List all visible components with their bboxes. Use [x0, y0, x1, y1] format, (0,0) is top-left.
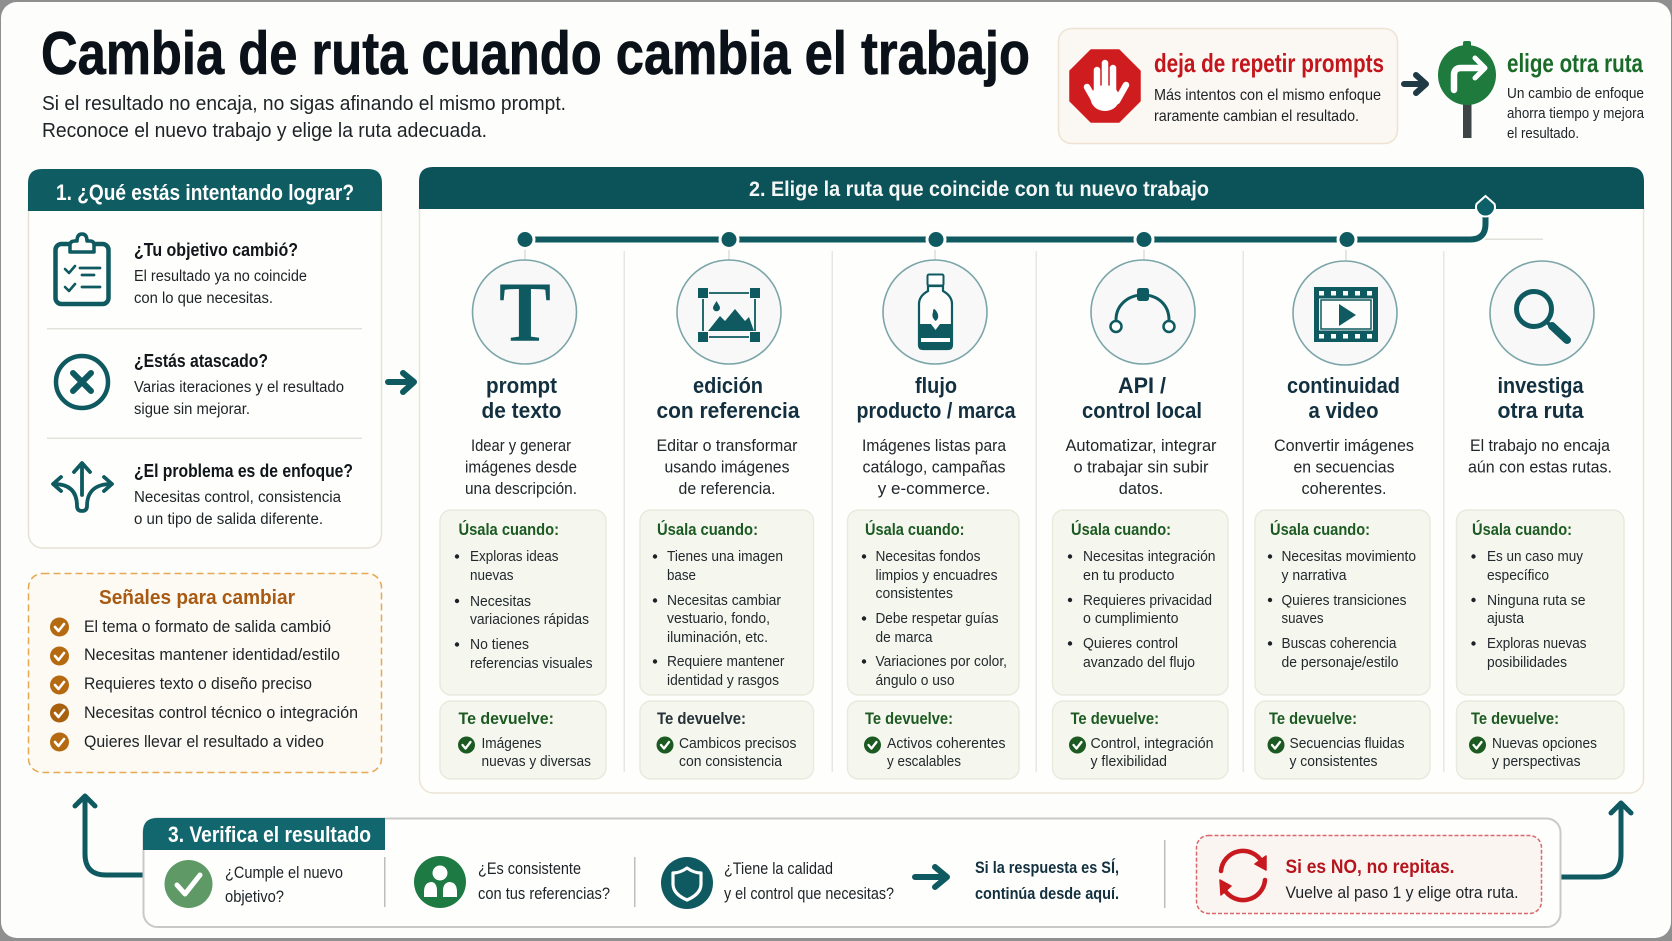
route: flujo producto / marca: producto / marca [856, 398, 1016, 423]
usala cuando: nuevas [470, 567, 514, 584]
panel: 3. verifica el resultado: ¿Cumple el nuevo [225, 864, 343, 882]
text: elige otra ruta: ahorra tiempo y mejora [1507, 105, 1645, 122]
route: prompt de texto: una descripción. [465, 480, 577, 498]
usala cuando [1456, 510, 1624, 695]
icon: bottle [883, 260, 987, 364]
te devuelve: Te devuelve: [1269, 710, 1357, 728]
panel: 3. verifica el resultado: ¿Tiene la calidad [724, 860, 833, 878]
usala cuando: Exploras nuevas [1487, 635, 1586, 652]
usala cuando: No tienes [470, 636, 529, 653]
usala cuando: consistentes [876, 585, 953, 602]
usala cuando: Necesitas cambiar [667, 592, 781, 609]
panel: 1. Qué estás intentando lograr: El resultado ya no coincide [134, 268, 307, 285]
panel: deja de repetir prompts [1058, 28, 1398, 144]
usala cuando: posibilidades [1487, 654, 1567, 671]
panel: 1. Qué estás intentando lograr: 1. ¿Qué estás intentando lograr? [56, 180, 354, 205]
text: elige otra ruta: el resultado. [1507, 125, 1579, 142]
usala cuando: Requiere mantener [667, 653, 784, 670]
te devuelve: Secuencias fluidas [1290, 735, 1404, 752]
usala cuando: Úsala cuando: [458, 520, 559, 539]
te devuelve: Activos coherentes [887, 735, 1006, 752]
te devuelve: Te devuelve: [865, 710, 953, 728]
usala cuando: Ninguna ruta se [1487, 592, 1586, 609]
subtitle: Si el resultado no encaja, no sigas afinando el mismo prompt. [42, 93, 566, 115]
arrow: to si la respuesta [915, 867, 947, 887]
usala cuando: Úsala cuando: [1270, 520, 1370, 539]
te devuelve [640, 701, 814, 779]
usala cuando: Úsala cuando: [1071, 520, 1171, 539]
route: continuidad a video: continuidad [1287, 373, 1400, 398]
usala cuando: Necesitas fondos [876, 548, 980, 565]
icon: people [414, 856, 466, 908]
usala cuando: Necesitas integración [1083, 548, 1216, 565]
callout: si es no: Si es NO, no repitas. [1286, 857, 1454, 878]
route: investiga otra ruta: aún con estas rutas. [1468, 458, 1612, 476]
panel: deja de repetir prompts: Más intentos con el mismo enfoque [1154, 87, 1381, 104]
panel: 1. Qué estás intentando lograr: ¿Estás atascado? [134, 351, 268, 371]
te devuelve: Te devuelve: [657, 710, 746, 728]
panel: señales para cambiar: Señales para cambiar [99, 587, 295, 609]
usala cuando: Buscas coherencia [1282, 635, 1397, 652]
subtitle [42, 93, 566, 142]
usala cuando: Tienes una imagen [667, 548, 783, 565]
panel: señales para cambiar: Necesitas control técnico o integración [84, 704, 358, 722]
usala cuando [848, 510, 1019, 695]
route: edición con referencia: con referencia [656, 398, 800, 423]
text: elige otra ruta [1507, 48, 1645, 142]
route: continuidad a video: en secuencias [1294, 458, 1394, 476]
panel: 3. verifica el resultado: y el control que necesitas? [724, 885, 894, 903]
route: edición con referencia: de referencia. [678, 480, 776, 498]
usala cuando: avanzado del flujo [1083, 654, 1195, 671]
usala cuando: de marca [876, 629, 933, 646]
panel: 1. Qué estás intentando lograr: ¿El problema es de enfoque? [134, 461, 353, 481]
te devuelve [848, 701, 1019, 779]
usala cuando: de personaje/estilo [1282, 654, 1398, 671]
usala cuando: Necesitas [470, 593, 531, 610]
arrow: loop left back up [75, 796, 143, 875]
te devuelve: Te devuelve: [1471, 710, 1559, 728]
route: flujo producto / marca: catálogo, campañas [862, 458, 1006, 476]
callout: si es no: Vuelve al paso 1 y elige otra ruta. [1286, 884, 1518, 902]
te devuelve: Control, integración [1090, 735, 1214, 752]
panel: señales para cambiar: El tema o formato de salida cambió [84, 618, 331, 636]
route: prompt de texto [440, 260, 606, 779]
route: continuidad a video [1255, 261, 1430, 779]
te devuelve: Te devuelve: [458, 710, 554, 728]
usala cuando: y narrativa [1282, 567, 1347, 584]
usala cuando: limpios y encuadres [876, 567, 998, 584]
icon: bezier arc [1091, 260, 1195, 364]
title: Cambia de ruta cuando cambia el trabajo [41, 20, 1030, 87]
route: edición con referencia: Editar o transformar [656, 437, 798, 455]
arrow: loop right back up [1560, 803, 1631, 877]
te devuelve: Nuevas opciones [1492, 735, 1597, 752]
text: si la respuesta es sí [975, 858, 1119, 903]
route: continuidad a video: coherentes. [1302, 480, 1386, 498]
te devuelve: y escalables [887, 753, 961, 770]
usala cuando: ajusta [1487, 610, 1525, 627]
usala cuando: Exploras ideas [470, 548, 558, 565]
te devuelve [440, 701, 606, 779]
route: API / control local: API / [1118, 373, 1167, 398]
panel: 1. Qué estás intentando lograr: o un tipo de salida diferente. [134, 511, 323, 528]
panel: 1. Qué estás intentando lograr: Necesitas control, consistencia [134, 489, 341, 506]
route: continuidad a video: Convertir imágenes [1274, 437, 1414, 455]
route: flujo producto / marca: flujo [915, 373, 957, 398]
panel: 1. Qué estás intentando lograr: Varias iteraciones y el resultado [134, 379, 344, 396]
route: investiga otra ruta [1456, 261, 1624, 779]
callout: si es no [1196, 836, 1542, 914]
usala cuando: Quieres transiciones [1282, 592, 1406, 609]
usala cuando: específico [1487, 567, 1549, 584]
text: elige otra ruta: Un cambio de enfoque [1507, 85, 1644, 102]
arrow: to elige otra ruta [1404, 75, 1426, 93]
panel: señales para cambiar: Quieres llevar el resultado a video [84, 733, 324, 751]
usala cuando: iluminación, etc. [667, 629, 768, 646]
route: flujo producto / marca: Imágenes listas para [862, 437, 1007, 455]
route line with stops [516, 196, 1543, 260]
route: prompt de texto: prompt [486, 373, 557, 398]
text: si la respuesta es sí: continúa desde aquí. [975, 884, 1119, 903]
usala cuando: Úsala cuando: [865, 520, 964, 539]
panel: señales para cambiar: Requieres texto o diseño preciso [84, 675, 312, 693]
route: API / control local: Automatizar, integrar [1066, 437, 1217, 455]
icon: stop hand [1070, 50, 1140, 122]
icon: shield [661, 857, 713, 909]
route: prompt de texto: Idear y generar [471, 437, 571, 455]
usala cuando: identidad y rasgos [667, 672, 779, 689]
icon: T [472, 260, 576, 364]
route: flujo producto / marca [848, 260, 1019, 779]
panel: 2. elige la ruta [419, 167, 1644, 793]
route: continuidad a video: a video [1308, 398, 1378, 423]
route: investiga otra ruta: El trabajo no encaja [1470, 437, 1611, 455]
panel: 1. Qué estás intentando lograr [28, 169, 382, 548]
route: API / control local: control local [1082, 398, 1202, 423]
route: prompt de texto: de texto [482, 398, 562, 423]
icon: T: T [499, 264, 551, 360]
panel: 3. verifica el resultado: objetivo? [225, 888, 284, 906]
route: edición con referencia [640, 260, 814, 779]
te devuelve [1255, 701, 1430, 779]
icon: red loop [1220, 851, 1266, 900]
text: si la respuesta es sí: Si la respuesta es SÍ, [975, 858, 1119, 877]
panel: 1. Qué estás intentando lograr: ¿Tu objetivo cambió? [134, 240, 298, 260]
usala cuando: vestuario, fondo, [667, 610, 770, 627]
te devuelve: Te devuelve: [1070, 710, 1159, 728]
usala cuando: Debe respetar guías [876, 610, 998, 627]
subtitle: Reconoce el nuevo trabajo y elige la ruta adecuada. [42, 120, 487, 142]
panel: deja de repetir prompts: raramente cambian el resultado. [1154, 108, 1359, 125]
panel: 3. verifica el resultado: 3. Verifica el resultado [168, 822, 371, 847]
icon: x circle [56, 356, 108, 408]
icon: image frame [677, 260, 781, 364]
route: API / control local [1052, 260, 1228, 779]
icon: green check [164, 860, 212, 908]
usala cuando [1255, 510, 1430, 695]
usala cuando [640, 510, 814, 695]
route: flujo producto / marca: y e-commerce. [878, 480, 990, 498]
panel: 1. Qué estás intentando lograr: con lo que necesitas. [134, 290, 273, 307]
route: API / control local: datos. [1119, 480, 1163, 498]
route: API / control local: o trabajar sin subir [1074, 458, 1209, 476]
icon: film strip [1293, 261, 1397, 365]
icon: green turn sign [1438, 41, 1496, 138]
usala cuando: Quieres control [1083, 635, 1178, 652]
usala cuando: Es un caso muy [1487, 548, 1583, 565]
panel: 2. elige la ruta: 2. Elige la ruta que coincide con tu nuevo trabajo [749, 178, 1209, 201]
route: edición con referencia: usando imágenes [664, 458, 790, 476]
panel: 3. verifica el resultado: con tus referencias? [478, 885, 610, 903]
te devuelve: y perspectivas [1492, 753, 1580, 770]
te devuelve: Imágenes [482, 735, 542, 752]
te devuelve [1456, 701, 1624, 779]
usala cuando: base [667, 567, 696, 584]
usala cuando: referencias visuales [470, 655, 592, 672]
icon: check list markers [50, 618, 69, 752]
te devuelve: nuevas y diversas [482, 753, 591, 770]
usala cuando: Necesitas movimiento [1282, 548, 1416, 565]
usala cuando: o cumplimiento [1083, 610, 1178, 627]
te devuelve: y consistentes [1290, 753, 1378, 770]
route: investiga otra ruta: investiga [1498, 373, 1584, 398]
usala cuando: Úsala cuando: [657, 520, 758, 539]
usala cuando: Úsala cuando: [1472, 520, 1572, 539]
usala cuando: Variaciones por color, [876, 653, 1007, 670]
usala cuando: en tu producto [1083, 567, 1174, 584]
te devuelve: con consistencia [679, 753, 783, 770]
usala cuando: Requieres privacidad [1083, 592, 1212, 609]
panel: 3. verifica el resultado [143, 818, 1560, 927]
route: investiga otra ruta: otra ruta [1498, 398, 1584, 423]
te devuelve: y flexibilidad [1090, 753, 1167, 770]
panel: 1. Qué estás intentando lograr: sigue sin mejorar. [134, 401, 250, 418]
icon: branching arrows [53, 463, 112, 511]
usala cuando [1052, 510, 1228, 695]
te devuelve [1052, 701, 1228, 779]
usala cuando [440, 510, 606, 695]
arrow: step 1 to step 2 [388, 373, 414, 392]
usala cuando: suaves [1282, 610, 1324, 627]
panel: señales para cambiar [28, 574, 382, 772]
icon: clipboard [56, 234, 108, 304]
usala cuando: ángulo o uso [876, 672, 954, 689]
usala cuando: variaciones rápidas [470, 611, 589, 628]
route: edición con referencia: edición [693, 373, 763, 398]
panel: señales para cambiar: Necesitas mantener identidad/estilo [84, 646, 340, 664]
route: prompt de texto: imágenes desde [465, 458, 577, 476]
panel: deja de repetir prompts: deja de repetir prompts [1154, 48, 1384, 78]
icon: magnifier [1490, 261, 1594, 365]
te devuelve: Cambicos precisos [679, 735, 796, 752]
panel: 3. verifica el resultado: ¿Es consistente [478, 860, 581, 878]
